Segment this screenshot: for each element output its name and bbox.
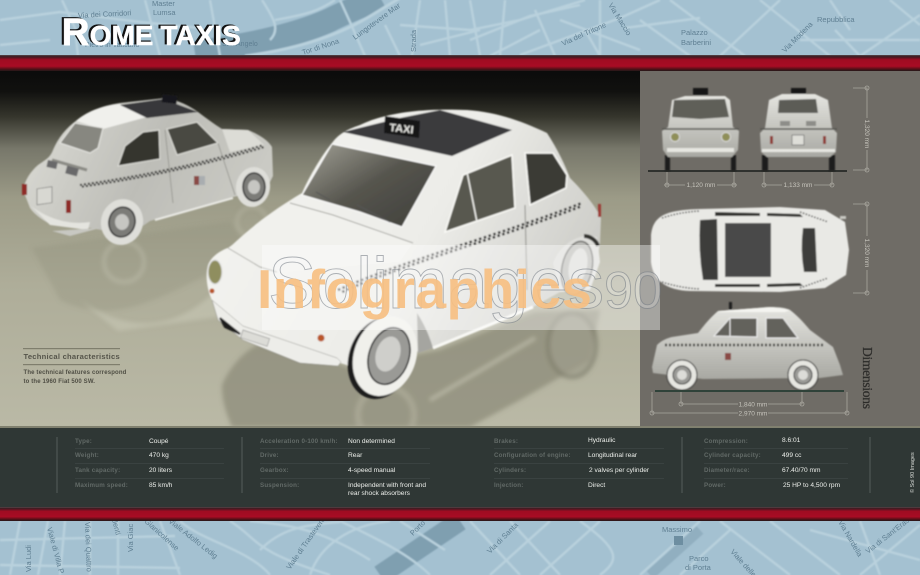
small taxi: roof bbox=[120, 99, 198, 118]
reflections on the floor bbox=[32, 207, 600, 443]
spec column 3: 2 valves per cylinder bbox=[589, 467, 650, 474]
main taxi: TAXI sign bbox=[384, 116, 420, 138]
spec column 3: Direct bbox=[588, 482, 605, 489]
red band: top bbox=[0, 55, 920, 71]
spec column 1: 20 liters bbox=[149, 467, 173, 474]
small taxi: front window bbox=[167, 122, 218, 155]
dimension values: 2,970 mm bbox=[739, 410, 767, 418]
main scene background bbox=[0, 71, 640, 427]
spec column 4: 499 cc bbox=[782, 452, 802, 459]
small taxi: emblem bbox=[194, 176, 205, 185]
main taxi: checker stripe bbox=[338, 203, 582, 293]
ground line bbox=[648, 170, 847, 172]
map labels: bottom: Gianicolense bbox=[143, 517, 181, 552]
top view of taxi bbox=[651, 207, 849, 292]
spec column 3: Longitudinal rear bbox=[588, 452, 638, 459]
dimension values: 1,133 mm bbox=[784, 182, 812, 189]
spec column 4: Compression: bbox=[704, 438, 748, 445]
map labels: top: Palazzo bbox=[681, 28, 708, 37]
technical characteristics note: The technical features correspond bbox=[24, 370, 127, 376]
technical characteristics note bbox=[23, 348, 127, 385]
red band: bottom bbox=[0, 507, 920, 521]
map labels: top: Tor di Nona bbox=[301, 36, 341, 57]
map labels: top: Repubblica bbox=[817, 15, 855, 24]
spec column 2: Gearbox: bbox=[260, 467, 289, 474]
spec column 2: Non determined bbox=[348, 438, 395, 445]
main taxi: side window rear bbox=[525, 153, 567, 205]
copyright: © Sol 90 Images bbox=[909, 452, 916, 493]
spec column 4: 25 HP to 4,500 rpm bbox=[783, 482, 841, 489]
map labels: top: Via dei Corridori bbox=[78, 8, 132, 20]
map labels: bottom: Massimo bbox=[662, 525, 692, 534]
map labels: bottom: di Porta bbox=[685, 563, 712, 572]
technical characteristics note: to the 1960 Fiat 500 SW. bbox=[24, 379, 95, 385]
main taxi: windscreen bbox=[302, 144, 436, 227]
spec column 2: 4-speed manual bbox=[348, 467, 396, 474]
watermark: Solimages90 bbox=[268, 244, 662, 324]
map labels: top: Lumsa bbox=[153, 8, 176, 17]
main taxi: TAXI sign: TAXI bbox=[389, 122, 414, 137]
spec column 3: Hydraulic bbox=[588, 437, 616, 444]
dimensions heading: Dimensions bbox=[860, 347, 875, 409]
main taxi: plate bbox=[241, 330, 270, 346]
map labels: top: Via del Tritone bbox=[560, 20, 607, 48]
technical characteristics note: Technical characteristics bbox=[24, 352, 120, 361]
spec column 3: Configuration of engine: bbox=[494, 452, 571, 459]
spec column 1: 470 kg bbox=[149, 452, 169, 459]
spec column 4: Cylinder capacity: bbox=[704, 452, 761, 459]
dimension values: 1,120 mm bbox=[687, 182, 715, 189]
map labels: top: Pietro in Vaticano bbox=[85, 42, 139, 49]
small taxi: rear wheel bbox=[96, 194, 148, 250]
map labels: bottom: Porto bbox=[408, 518, 427, 537]
map labels: bottom: Jenti bbox=[110, 518, 123, 536]
map labels: top bbox=[78, 0, 855, 57]
main taxi: hood bbox=[228, 203, 413, 272]
main taxi: body bbox=[207, 110, 601, 366]
title: ROMETAXIS bbox=[62, 11, 241, 54]
main taxi: rear wheel bbox=[553, 236, 600, 298]
spec column 2: rear shock absorbers bbox=[348, 490, 411, 497]
spec dividers bbox=[57, 437, 870, 493]
spec column 1: Maximum speed: bbox=[75, 482, 128, 489]
spec column 4: Power: bbox=[704, 482, 726, 489]
map labels: top: Barberini bbox=[681, 38, 711, 47]
map labels: bottom: Via di Sant'Erasmo bbox=[864, 509, 919, 556]
spec column 1: 85 km/h bbox=[149, 482, 173, 489]
dimension values: 1,840 mm bbox=[739, 402, 767, 408]
main taxi: front wheel bbox=[337, 307, 428, 408]
spec column 3: Cylinders: bbox=[494, 467, 526, 474]
small taxi, rear three-quarter view bbox=[22, 94, 273, 250]
map labels: bottom: Parco bbox=[689, 554, 709, 563]
main taxi: bumper bbox=[212, 300, 341, 366]
map labels: bottom bbox=[24, 509, 919, 575]
spec column 3: Injection: bbox=[494, 482, 524, 489]
small taxi: rear window bbox=[60, 123, 103, 153]
spec column 3 bbox=[494, 437, 650, 489]
map labels: bottom: Via Ludi bbox=[24, 545, 33, 572]
map labels: bottom: Viale di Villa P bbox=[45, 526, 66, 575]
map labels: bottom: Viale Adolfo Ledig bbox=[167, 516, 220, 560]
spec column 2 bbox=[260, 438, 426, 497]
spec column 4: Diameter/race: bbox=[704, 467, 750, 474]
spec column 1: Coupé bbox=[149, 438, 169, 445]
map labels: top: San Angelo bbox=[222, 41, 258, 48]
spec column 2: Independent with front and bbox=[348, 482, 426, 489]
main taxi: wipers bbox=[316, 192, 390, 222]
specifications band bbox=[0, 426, 920, 508]
spec column 3: Brakes: bbox=[494, 438, 518, 445]
main taxi, front three-quarter view bbox=[207, 110, 601, 408]
metro icon bbox=[674, 536, 683, 545]
dimension values: 1,320 mm bbox=[863, 120, 870, 148]
small taxi: plate bbox=[37, 187, 52, 205]
map labels: top: Lungotevere Mar bbox=[351, 1, 402, 42]
small taxi: sign bbox=[162, 94, 177, 104]
dimension marks bbox=[650, 86, 869, 415]
main taxi: tail light bbox=[598, 204, 601, 217]
spec column 2: Suspension: bbox=[260, 482, 299, 489]
spec column 4 bbox=[704, 437, 841, 489]
dimension values bbox=[687, 120, 870, 418]
map labels: bottom: Viale di Trastevere bbox=[284, 515, 327, 571]
map background: bottom bbox=[0, 520, 920, 575]
map labels: bottom: Via Giac bbox=[126, 524, 135, 552]
spec column 1: Weight: bbox=[75, 452, 99, 459]
map labels: bottom: Via dei Quattro bbox=[83, 522, 94, 572]
small taxi: checker stripe bbox=[80, 145, 264, 187]
side view ground line bbox=[655, 390, 844, 392]
map labels: top: Strada bbox=[409, 29, 418, 52]
spec column 1: Tank capacity: bbox=[75, 467, 120, 474]
main taxi: roof panel bbox=[343, 110, 512, 156]
main taxi: side window front bbox=[445, 155, 515, 232]
map labels: top: Via Modena bbox=[780, 19, 815, 54]
small taxi: front wheel bbox=[233, 164, 273, 210]
map labels: top: Via Maccio bbox=[606, 1, 633, 37]
map labels: bottom: Via di Santa bbox=[485, 520, 521, 555]
map labels: bottom: Via Nardella bbox=[836, 518, 865, 559]
spec column 2: Rear bbox=[348, 452, 363, 459]
dimension values: 1,320 mm bbox=[863, 239, 870, 267]
spec column 1 bbox=[75, 438, 173, 489]
front view of taxi bbox=[662, 88, 739, 171]
side view of taxi bbox=[652, 302, 843, 390]
spec column 2: Drive: bbox=[260, 452, 279, 459]
main taxi: headlight bbox=[208, 260, 222, 284]
map background: top bbox=[0, 0, 920, 57]
spec column 2: Acceleration 0-100 km/h: bbox=[260, 438, 338, 445]
watermark: Infographics bbox=[257, 258, 592, 320]
rear view of taxi bbox=[760, 88, 837, 171]
spec column 4: 8.6:01 bbox=[782, 437, 801, 444]
small taxi: side window bbox=[118, 130, 160, 166]
spec column 1: Type: bbox=[75, 438, 92, 445]
spec column 4: 67.40/70 mm bbox=[782, 467, 821, 474]
title: ROMETAXIS bbox=[60, 10, 239, 53]
dimensions panel bbox=[640, 71, 920, 427]
